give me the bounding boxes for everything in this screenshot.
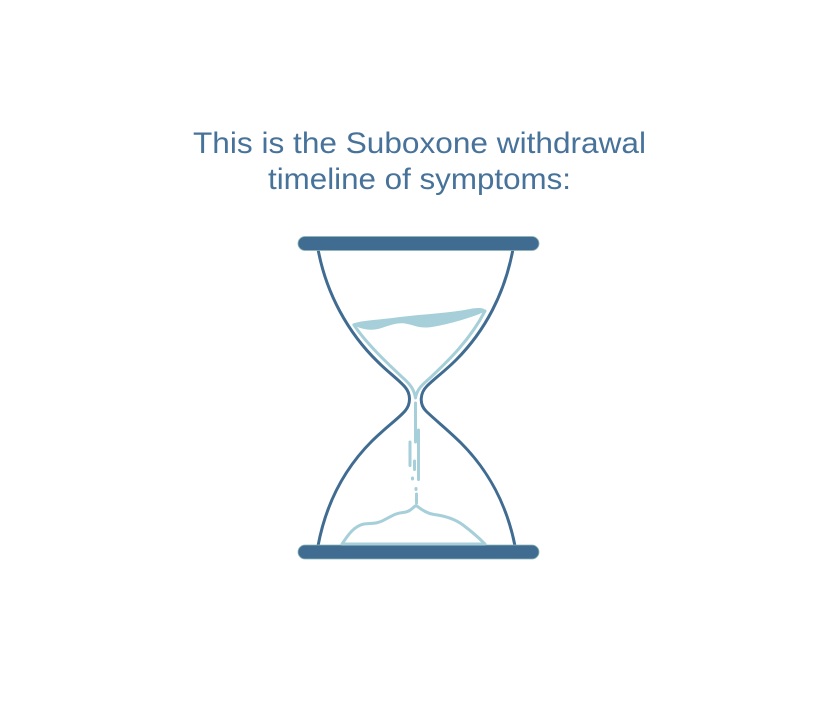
falling sand	[410, 403, 418, 503]
title: This is the Suboxone withdrawal	[193, 127, 646, 160]
top bar	[298, 236, 539, 250]
icon: hourglass	[298, 236, 539, 559]
lower sand pile	[342, 506, 485, 544]
upper sand	[352, 308, 486, 398]
title: timeline of symptoms:	[268, 163, 571, 196]
title	[193, 127, 646, 196]
bottom bar	[298, 545, 539, 559]
glass outline	[318, 249, 515, 546]
